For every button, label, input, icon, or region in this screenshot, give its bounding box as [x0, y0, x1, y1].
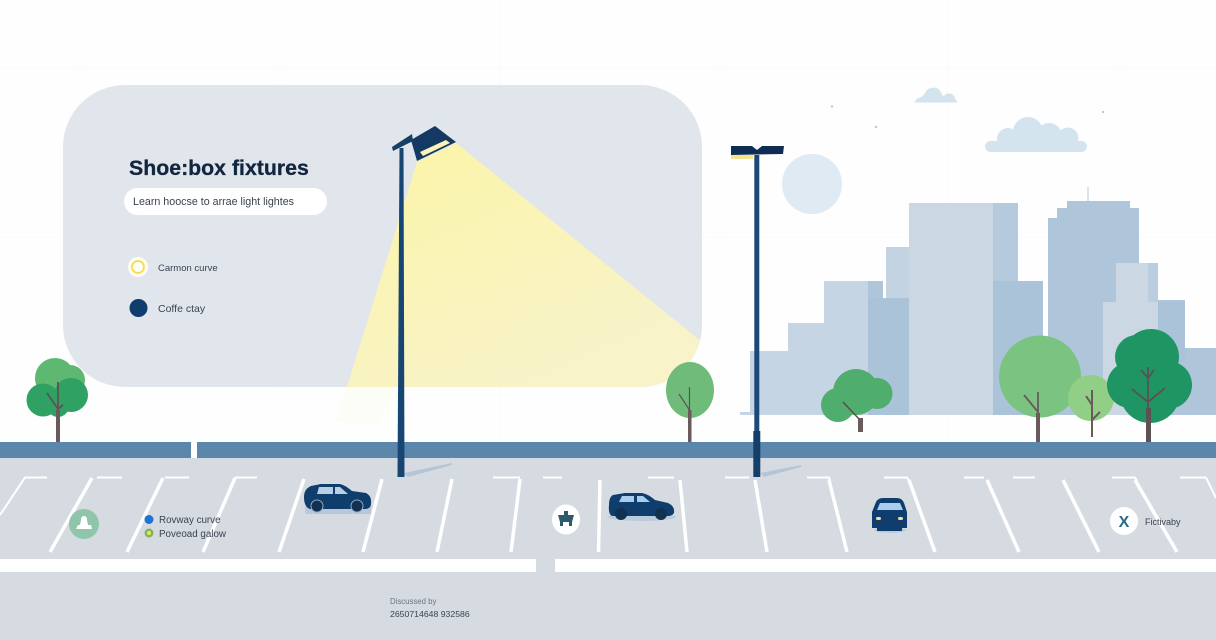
- legend item: coffe ctay: Coffe ctay: [158, 303, 206, 315]
- icon: bench badge: [552, 504, 580, 534]
- icon: green person badge: [69, 509, 99, 539]
- legend item: carmon curve: [128, 257, 218, 277]
- tree far left: [26, 358, 88, 442]
- curb strip: [0, 559, 1216, 572]
- moon: [782, 154, 842, 214]
- legend: parking lot: Rovway curve: [159, 515, 221, 526]
- car front: [872, 498, 907, 533]
- subtitle pill: [124, 188, 327, 215]
- parking lot surface: [0, 458, 1216, 640]
- legend item: coffe ctay: [130, 299, 206, 317]
- icon: X badge with label: [1110, 507, 1181, 535]
- credit text: 2650714648 932586: [390, 609, 470, 619]
- cloud large: [985, 117, 1087, 152]
- credit text: [390, 597, 470, 619]
- legend: parking lot: [144, 515, 227, 540]
- skyline: [740, 187, 1216, 415]
- tree mid: [666, 362, 714, 442]
- tree dark: [1107, 329, 1192, 442]
- tree small skyline: [821, 369, 892, 432]
- cloud small: [915, 88, 958, 102]
- icon: X badge with label: Fictivaby: [1145, 517, 1181, 527]
- car left: [304, 484, 371, 514]
- tree light: [1068, 375, 1114, 437]
- subtitle pill: Learn hoocse to arrae light lightes: [133, 196, 294, 208]
- street lamp right: [731, 146, 784, 477]
- legend item: carmon curve: Carmon curve: [158, 263, 218, 274]
- panel: title card: [63, 85, 702, 387]
- icon: X badge with label: X: [1119, 514, 1130, 531]
- credit text: Discussed by: [390, 597, 436, 606]
- stars: [831, 105, 1104, 128]
- light beam from shoebox fixture: [347, 143, 700, 387]
- legend: parking lot: Poveoad galow: [159, 529, 227, 540]
- pole shadows: [404, 463, 801, 477]
- road band: [0, 442, 1216, 458]
- tree round: [999, 336, 1081, 442]
- car center: [608, 493, 676, 521]
- parking lines: [0, 478, 1216, 552]
- title: Shoe:box fixtures: [129, 156, 309, 180]
- street lamp left: [392, 126, 456, 477]
